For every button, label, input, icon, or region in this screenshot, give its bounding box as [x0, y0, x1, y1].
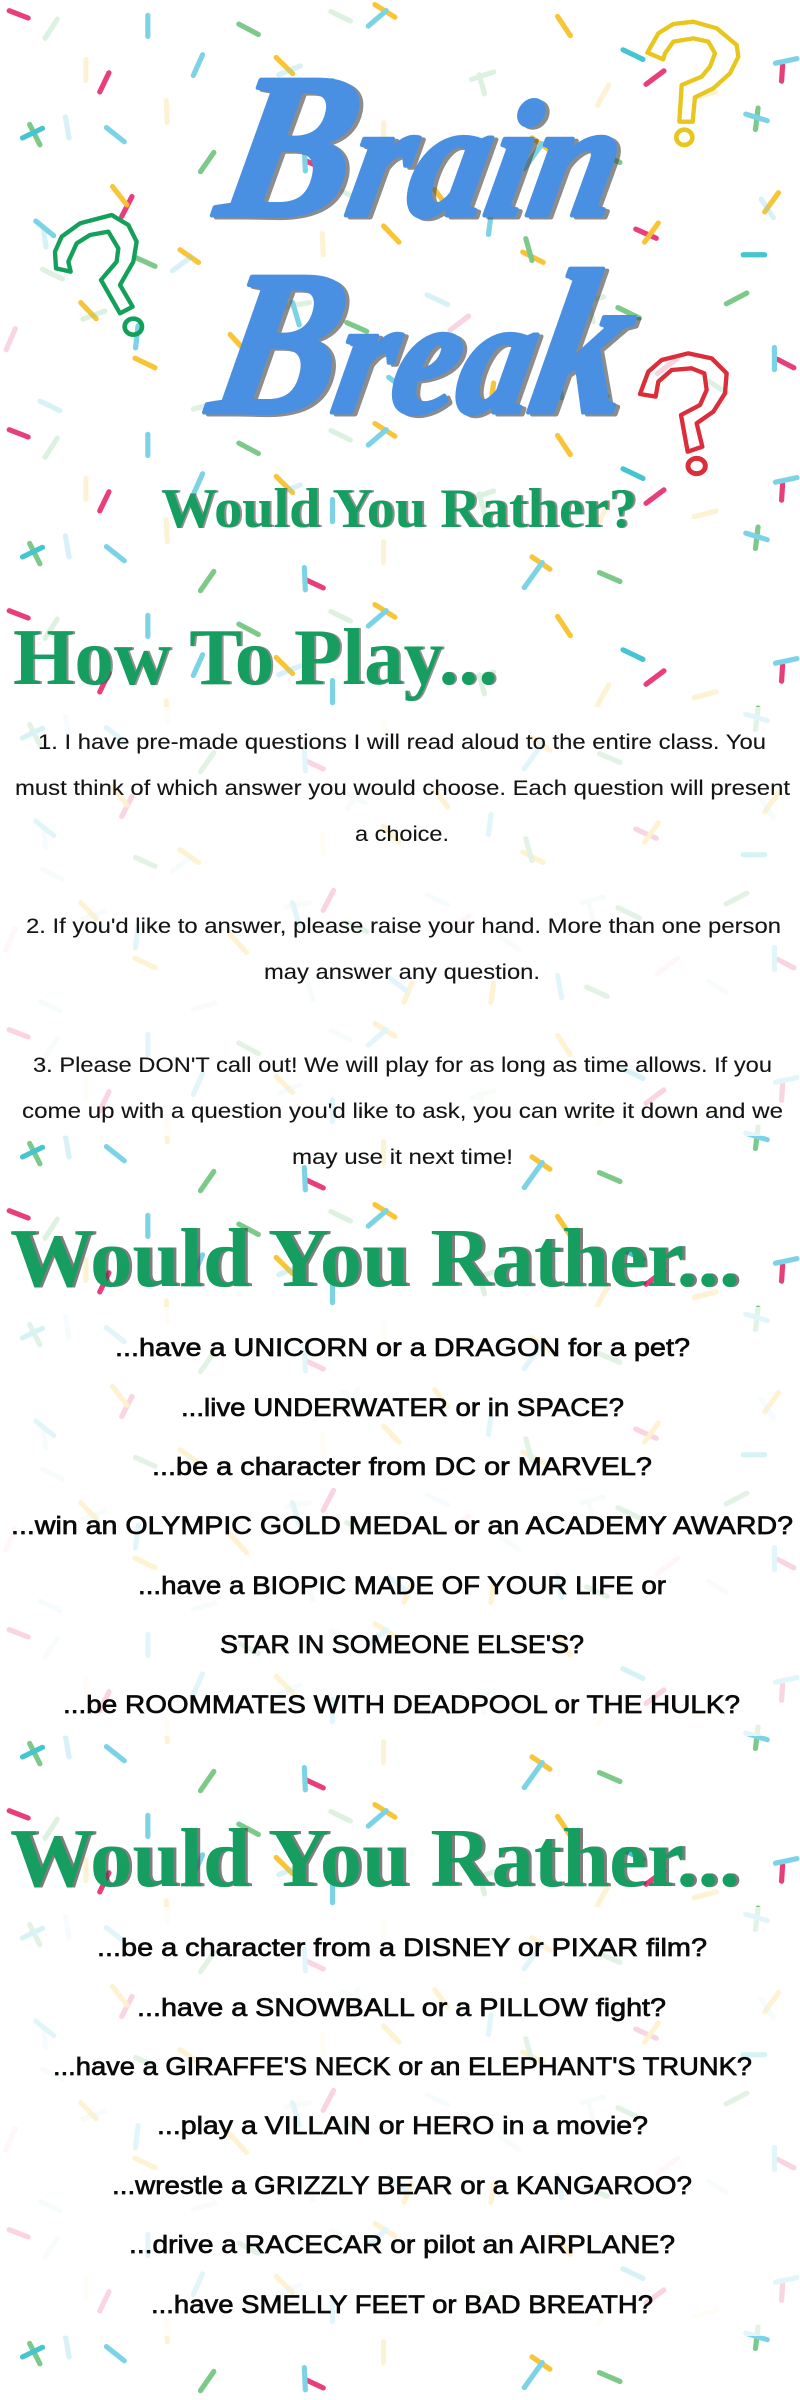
question list: first set — [11, 1334, 793, 1719]
question list: second set: ...have a SNOWBALL or a PILLOW fight? — [137, 1994, 666, 2022]
question list: first set: ...have a BIOPIC MADE OF YOUR LIFE or — [138, 1572, 666, 1600]
instruction 2: may answer any question. — [264, 960, 540, 984]
instruction 2: 2. If you'd like to answer, please raise your hand. More than one person — [26, 914, 781, 938]
question list: first set: ...win an OLYMPIC GOLD MEDAL or an ACADEMY AWARD? — [11, 1512, 793, 1540]
icon: red question mark — [640, 353, 727, 474]
instruction 3: come up with a question you'd like to ask, you can write it down and we — [22, 1099, 783, 1123]
question list: second set: ...wrestle a GRIZZLY BEAR or a KANGAROO? — [112, 2172, 692, 2200]
instruction 2 — [26, 914, 781, 984]
instruction 3 — [22, 1053, 783, 1169]
question list: first set: ...be ROOMMATES WITH DEADPOOL or THE HULK? — [63, 1691, 740, 1719]
question list: second set: ...be a character from a DISNEY or PIXAR film? — [97, 1934, 707, 1962]
heading: How To Play: How To Play... — [13, 612, 498, 702]
subtitle: Would You Rather? — [161, 478, 637, 540]
heading: Would You Rather (second set): Would You Rather... — [10, 1812, 740, 1905]
heading: Would You Rather (first set): Would You Rather... — [10, 1212, 740, 1305]
question list: first set: STAR IN SOMEONE ELSE'S? — [220, 1631, 584, 1659]
question list: first set: ...have a UNICORN or a DRAGON for a pet? — [115, 1334, 690, 1362]
title word: Brain: Brain — [203, 32, 646, 260]
question list: second set: ...have SMELLY FEET or BAD BREATH? — [151, 2291, 653, 2319]
title: Brain Break — [196, 32, 654, 457]
text block: instructions — [15, 730, 790, 1169]
question list: first set: ...live UNDERWATER or in SPACE? — [181, 1394, 624, 1422]
question list: second set — [53, 1934, 752, 2319]
icon: yellow question mark — [647, 22, 738, 145]
question list: second set: ...drive a RACECAR or pilot an AIRPLANE? — [129, 2231, 675, 2259]
instruction 1 — [15, 730, 790, 846]
question list: first set: ...be a character from DC or MARVEL? — [152, 1453, 652, 1481]
instruction 1: must think of which answer you would choose. Each question will present — [15, 776, 790, 800]
instruction 3: may use it next time! — [292, 1145, 513, 1169]
title word: Break: Break — [196, 229, 654, 457]
question list: second set: ...play a VILLAIN or HERO in a movie? — [157, 2112, 648, 2140]
instruction 1: a choice. — [355, 822, 449, 846]
instruction 3: 3. Please DON'T call out! We will play for as long as time allows. If you — [33, 1053, 772, 1077]
question list: second set: ...have a GIRAFFE'S NECK or an ELEPHANT'S TRUNK? — [53, 2053, 752, 2081]
icon: green question mark — [55, 215, 142, 335]
instruction 1: 1. I have pre-made questions I will read aloud to the entire class. You — [38, 730, 766, 754]
